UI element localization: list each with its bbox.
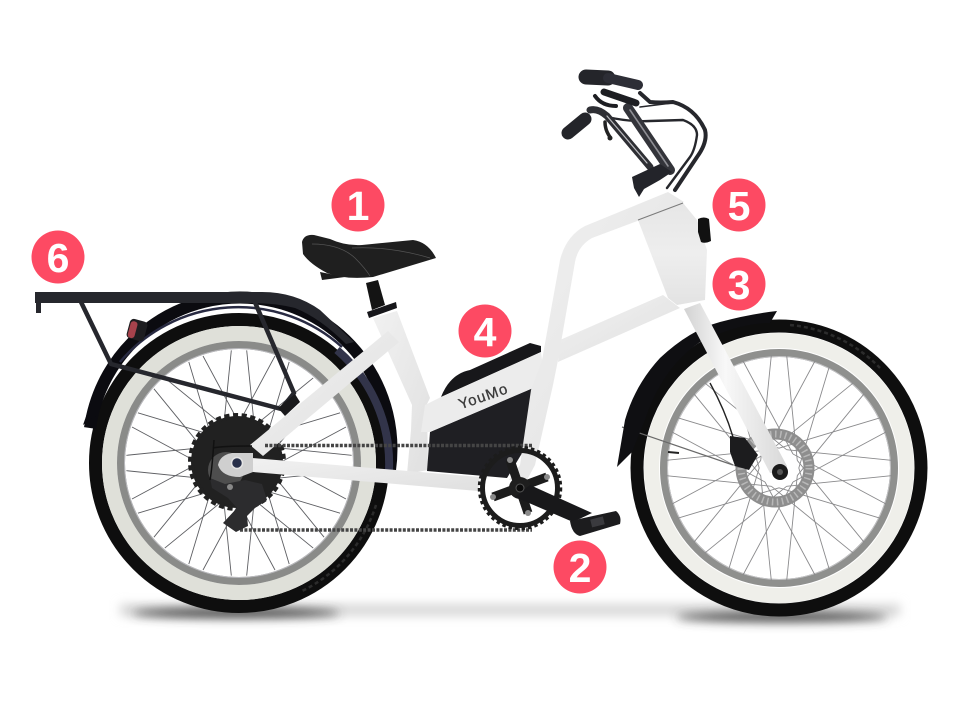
pedal [570,511,620,536]
badge 3: 3 [728,262,750,308]
rear wheel [96,320,382,606]
chainring and crank [480,448,592,528]
control panel [638,203,707,305]
badge 4 [458,304,512,358]
badge 1: 1 [347,183,369,229]
ground shadow [120,604,900,622]
saddle [302,235,436,278]
knob [698,218,711,243]
rear sprocket [191,416,283,508]
chain [240,446,532,530]
handlebars [568,77,706,197]
badge 1 [332,178,384,232]
brake caliper and cable [622,383,758,470]
battery lower case [427,388,533,478]
frame: rear section [218,311,480,491]
main arch tube and panel [421,192,684,480]
battery [427,343,541,478]
badge 6: 6 [47,235,69,281]
rear reflector [126,318,148,342]
badge 4: 4 [474,309,497,355]
badge 2 [554,540,606,594]
badge 5: 5 [728,183,750,229]
battery top cover [441,343,541,397]
brake disc [741,434,809,502]
front fender [617,311,777,467]
rear fender [83,298,391,470]
rear rack [35,292,354,416]
seat post [320,272,397,318]
badge 2: 2 [569,545,591,591]
badge 6 [32,230,84,284]
front wheel [637,325,921,610]
logo text: YouMo [456,380,511,413]
brake cables [640,93,706,190]
rear derailleur [210,440,267,532]
badge 3 [712,258,766,310]
front fork [684,303,788,480]
badge 5 [712,178,766,232]
